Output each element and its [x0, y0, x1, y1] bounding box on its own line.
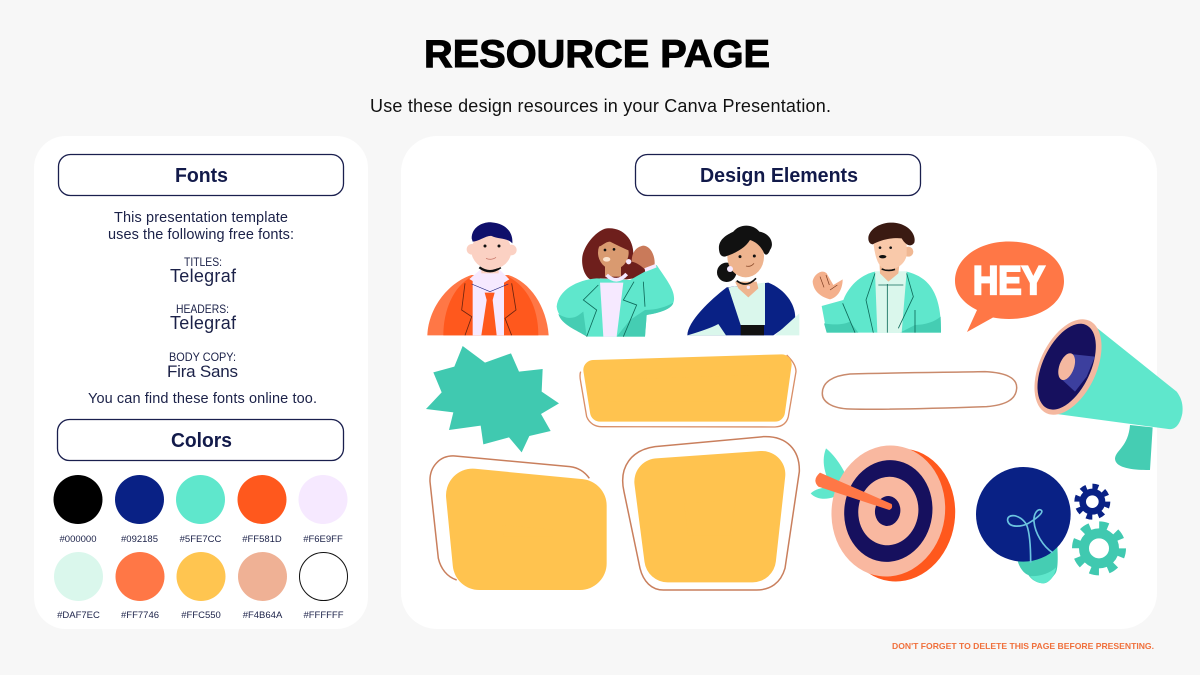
title: RESOURCE PAGE [424, 33, 770, 76]
character: man in teal jacket waving [813, 223, 941, 333]
text block: font list: TITLES: [184, 255, 222, 269]
text block: font list: HEADERS: [176, 302, 229, 316]
text block: font list [88, 210, 317, 407]
color swatches: #FFFFFF [303, 610, 344, 621]
heading: colors: Colors [171, 430, 232, 452]
heading: colors [58, 420, 344, 460]
subtitle: Use these design resources in your Canva Presentation. [370, 96, 831, 116]
text block: font list: Telegraf [170, 266, 237, 286]
character: woman in navy sweater [687, 226, 799, 335]
icon: target with arrow [811, 438, 964, 589]
heading: design elements [636, 154, 920, 196]
shape: left yellow frame [430, 456, 589, 580]
icon: megaphone [1021, 309, 1183, 470]
panel: design elements background [401, 136, 1157, 629]
color swatches: #FFC550 [181, 610, 221, 621]
text block: font list: BODY COPY: [169, 350, 236, 364]
heading: design elements: Design Elements [700, 165, 858, 187]
text block: font list: This presentation template [114, 210, 288, 226]
text block: font list: Fira Sans [167, 362, 238, 381]
panel: fonts and colors [34, 136, 368, 629]
color swatches: #000000 [60, 534, 96, 545]
text block: font list: You can find these fonts online too. [88, 391, 317, 407]
color swatches: #DAF7EC [57, 610, 100, 621]
shape: hand-drawn pill outline [822, 372, 1017, 409]
speech bubble: HEY [955, 242, 1064, 332]
character: man in orange jacket [427, 222, 549, 335]
color swatches [54, 475, 348, 621]
text block: font list: Telegraf [170, 313, 237, 333]
color swatches: #092185 [121, 534, 158, 545]
icon: small navy gear [1078, 487, 1107, 516]
text block: font list: uses the following free fonts: [108, 227, 294, 243]
shape: teal starburst [426, 346, 559, 452]
speech bubble: HEY: HEY [973, 259, 1045, 303]
shape: right yellow frame [623, 437, 799, 590]
icon: light bulb with gears [976, 467, 1122, 583]
icon: large teal gear [1076, 526, 1122, 571]
color swatches: #FF581D [242, 534, 282, 545]
heading: fonts [58, 154, 344, 196]
color swatches: #F4B64A [243, 610, 283, 621]
color swatches: #5FE7CC [180, 534, 221, 545]
color swatches: #FF7746 [121, 610, 159, 621]
color swatches: #F6E9FF [303, 534, 343, 545]
footer note: DON'T FORGET TO DELETE THIS PAGE BEFORE PRESENTING. [892, 641, 1154, 651]
shape: wide yellow frame [580, 355, 796, 427]
character: woman in teal jacket [557, 228, 674, 337]
heading: fonts: Fonts [175, 165, 228, 187]
